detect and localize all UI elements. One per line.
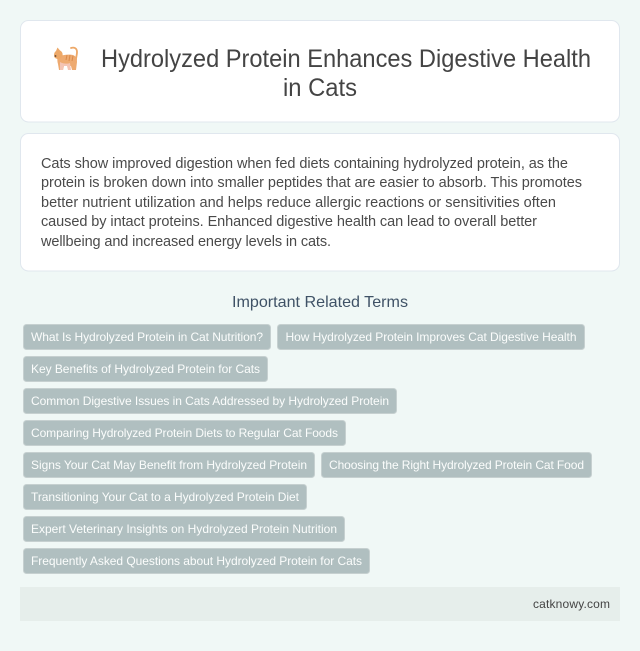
tag 5: Comparing Hydrolyzed Protein Diets to Regular Cat Foods [31,426,338,440]
title: in Cats [283,74,357,102]
tag 2 [278,324,584,350]
footer: catknowy.com [533,597,610,611]
text block: description [40,156,582,250]
text block: description: protein is broken down into smaller peptides that are easier to absorb. This promotes [41,175,582,191]
tag 6 [24,452,314,478]
text block: description: Cats show improved digestion when fed diets containing hydrolyzed protein, as the [41,156,568,172]
tag 1: What Is Hydrolyzed Protein in Cat Nutrition? [31,330,263,344]
icon: cat [54,48,77,70]
tag 9 [24,516,344,542]
tag 3 [24,356,268,382]
tag 7 [322,452,592,478]
tag 4 [24,388,396,414]
title: Hydrolyzed Protein Enhances Digestive Health [101,45,591,73]
tag 10 [24,548,370,574]
tag 1 [24,324,270,350]
tag 8: Transitioning Your Cat to a Hydrolyzed Protein Diet [31,490,300,504]
tag list [24,324,592,574]
heading: related terms: Important Related Terms [232,294,408,311]
tag 7: Choosing the Right Hydrolyzed Protein Cat Food [329,458,584,472]
tag 5 [24,420,346,446]
panel: title card [20,20,620,122]
tag 2: How Hydrolyzed Protein Improves Cat Digestive Health [286,330,576,344]
text block: description: wellbeing and increased energy levels in cats. [40,234,331,250]
title [101,45,591,102]
tag 4: Common Digestive Issues in Cats Addressed by Hydrolyzed Protein [31,394,389,408]
text block: description: caused by intact proteins. Enhanced digestive health can lead to overall better [41,214,537,230]
panel: description [20,134,620,271]
tag 9: Expert Veterinary Insights on Hydrolyzed Protein Nutrition [31,522,337,536]
tag 6: Signs Your Cat May Benefit from Hydrolyzed Protein [31,458,307,472]
footer [20,587,620,621]
tag 3: Key Benefits of Hydrolyzed Protein for Cats [31,362,260,376]
tag 10: Frequently Asked Questions about Hydrolyzed Protein for Cats [31,554,362,568]
text block: description: better nutrient utilization and helps reduce allergic reactions or sensitivities often [41,195,556,211]
tag 8 [24,484,306,510]
